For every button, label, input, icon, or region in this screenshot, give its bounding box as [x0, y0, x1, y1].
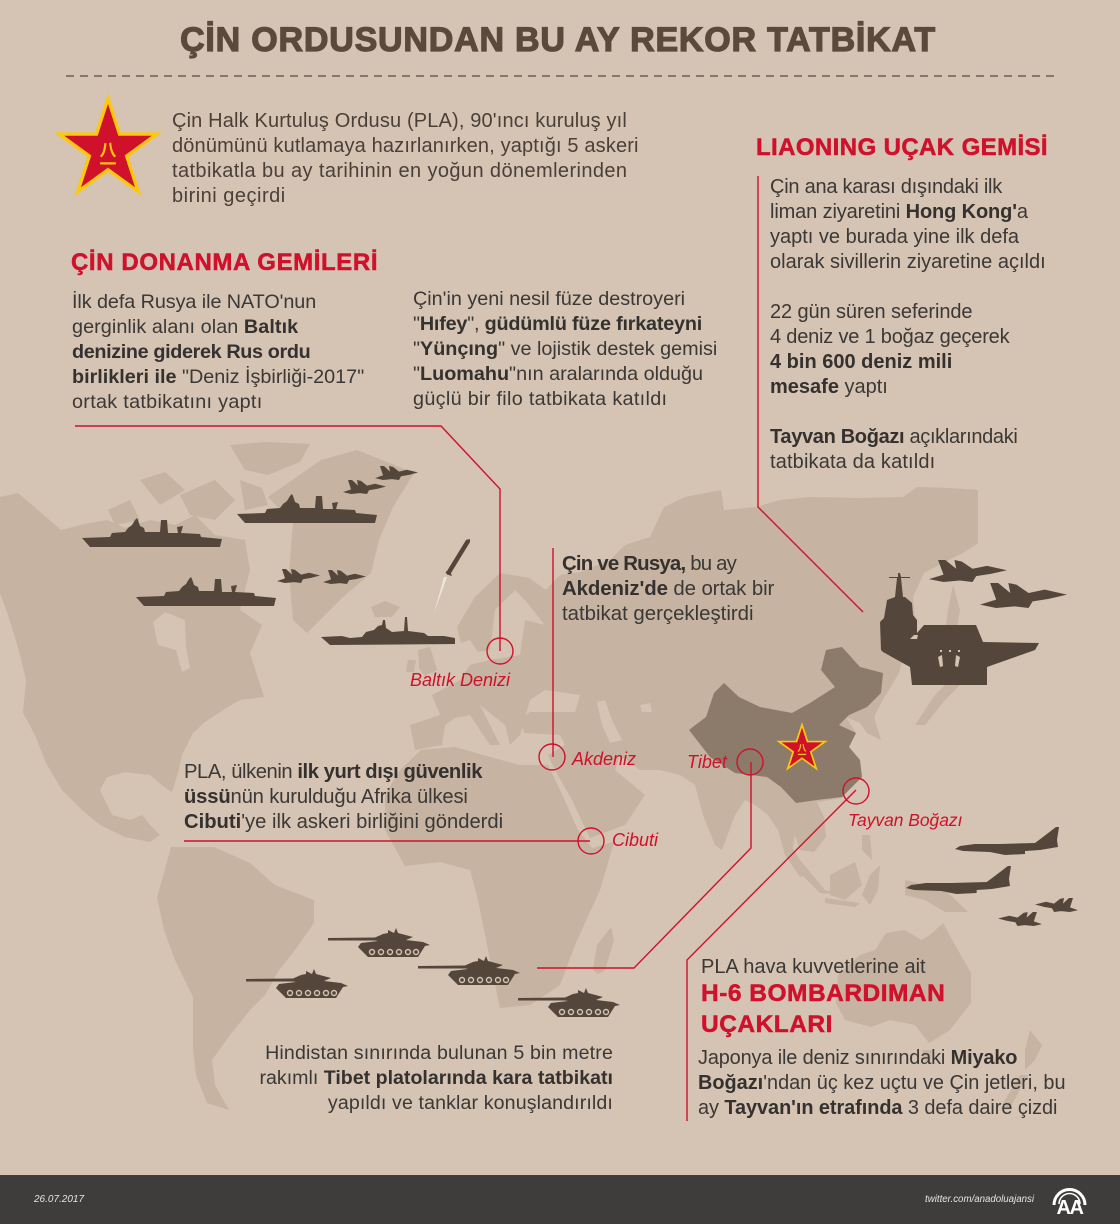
text: Djibouti: üssünün kurulduğu Afrika ülkesi — [184, 786, 468, 808]
text: Tibet: rakımlı Tibet platolarında kara tatbikatı — [259, 1067, 613, 1089]
text: Djibouti — [184, 761, 503, 833]
heading: H-6 bombers: H-6 BOMBARDIMAN — [701, 980, 945, 1007]
date: 26.07.2017 — [34, 1194, 84, 1205]
text: fleet: "Hıfey", güdümlü füze fırkateyni — [413, 313, 702, 335]
text: fleet: Çin'in yeni nesil füze destroyeri — [413, 288, 685, 310]
text: Liaoning: Tayvan Boğazı açıklarındaki — [770, 426, 1017, 448]
text: Djibouti: PLA, ülkenin ilk yurt dışı güvenlik — [184, 761, 482, 783]
text: fleet: güçlü bir filo tatbikata katıldı — [413, 388, 667, 410]
connector: Liaoning — [758, 176, 863, 612]
text: Baltic exercise — [72, 291, 364, 413]
heading: H-6 bombers: UÇAKLARI — [701, 1011, 833, 1038]
text: Mediterranean — [562, 553, 774, 625]
twitter handle: twitter.com/anadoluajansi — [925, 1194, 1034, 1205]
text: Mediterranean: tatbikat gerçekleştirdi — [562, 603, 754, 625]
text: Tibet — [259, 1042, 613, 1114]
dashed divider — [66, 75, 1055, 77]
connector: Akdeniz — [539, 548, 565, 770]
connector: Tayvan Boğazı — [687, 778, 869, 1121]
bombers — [906, 827, 1059, 894]
text: Baltic exercise: gerginlik alanı olan Baltık — [72, 316, 298, 338]
title: ÇİN ORDUSUNDAN BU AY REKOR TATBİKAT — [180, 21, 936, 59]
heading: Çin donanma gemileri: ÇİN DONANMA GEMİLERİ — [71, 249, 378, 276]
text: Liaoning: olarak sivillerin ziyaretine açıldı — [770, 251, 1046, 273]
small jets — [998, 898, 1078, 926]
text: fleet: "Yünçıng" ve lojistik destek gemisi — [413, 338, 717, 360]
label: Tayvan Boğazı: Tayvan Boğazı — [848, 810, 962, 830]
text: Miyako — [698, 1047, 1066, 1119]
label: Baltık Denizi: Baltık Denizi — [410, 670, 510, 690]
carrier jets — [929, 560, 1067, 608]
text: Liaoning: tatbikata da katıldı — [770, 451, 935, 473]
text: PLA air force: PLA hava kuvvetlerine ait — [701, 956, 926, 978]
text: Baltic exercise: denizine giderek Rus ordu — [72, 341, 310, 363]
text: fleet: "Luomahu"nın aralarında olduğu — [413, 363, 703, 385]
tanks — [246, 928, 620, 1017]
text: Mediterranean: Çin ve Rusya, bu ay — [562, 553, 736, 575]
text: Liaoning: 4 deniz ve 1 boğaz geçerek — [770, 326, 1009, 348]
text: Miyako: Japonya ile deniz sınırındaki Miyako — [698, 1047, 1017, 1069]
icon: PLA star: 八 — [100, 136, 116, 161]
intro text: tatbikatla bu ay tarihinin en yoğun dönemlerinden — [172, 160, 627, 182]
intro text: dönümünü kutlamaya hazırlanırken, yaptığı 5 askeri — [172, 135, 639, 157]
text: Miyako: Boğazı'ndan üç kez uçtu ve Çin jetleri, bu — [698, 1072, 1066, 1094]
text: fleet — [413, 288, 717, 410]
icon: star on China — [776, 722, 828, 771]
text: Liaoning: yaptı ve burada yine ilk defa — [770, 226, 1019, 248]
text: Tibet: yapıldı ve tanklar konuşlandırıldı — [328, 1092, 613, 1114]
text: Liaoning: liman ziyaretini Hong Kong'a — [770, 201, 1028, 223]
text: Baltic exercise: İlk defa Rusya ile NATO'nun — [72, 291, 316, 313]
text: Baltic exercise: birlikleri ile "Deniz İşbirliği-2017" — [72, 366, 364, 388]
icon: star on China: 八 — [797, 741, 807, 754]
text: Mediterranean: Akdeniz'de de ortak bir — [562, 578, 774, 600]
connector: Baltık Denizi — [75, 426, 513, 664]
connector: Cibuti — [184, 828, 604, 854]
china highlighted — [689, 647, 883, 803]
intro text — [172, 110, 639, 207]
footer bar — [0, 1175, 1120, 1224]
text: Miyako: ay Tayvan'ın etrafında 3 defa daire çizdi — [698, 1097, 1057, 1119]
label: Cibuti: Cibuti — [612, 830, 658, 850]
text: Liaoning: 22 gün süren seferinde — [770, 301, 972, 323]
text: Baltic exercise: ortak tatbikatını yaptı — [72, 391, 263, 413]
aircraft carrier — [880, 573, 1039, 685]
heading: Liaoning: LIAONING UÇAK GEMİSİ — [756, 134, 1048, 161]
text: Djibouti: Cibuti'ye ilk askeri birliğini gönderdi — [184, 811, 503, 833]
intro text: Çin Halk Kurtuluş Ordusu (PLA), 90'ıncı kuruluş yıl — [172, 110, 627, 132]
text: Liaoning: Çin ana karası dışındaki ilk — [770, 176, 1002, 198]
fighter jets over Greenland — [277, 466, 418, 584]
label: Akdeniz: Akdeniz — [572, 749, 636, 769]
missile — [434, 539, 470, 613]
text: Tibet: Hindistan sınırında bulunan 5 bin metre — [265, 1042, 613, 1064]
ships group — [82, 494, 455, 645]
connector: Tibet — [537, 749, 763, 968]
logo: AA — [1052, 1188, 1086, 1216]
icon: PLA star: 一 — [100, 150, 116, 175]
text: Liaoning: mesafe yaptı — [770, 376, 888, 398]
heading: H-6 bombers — [701, 980, 945, 1038]
text: Liaoning: 4 bin 600 deniz mili — [770, 351, 952, 373]
text: Liaoning — [770, 176, 1046, 473]
icon: star on China: 一 — [797, 748, 807, 761]
icon: PLA star — [54, 93, 162, 196]
intro text: birini geçirdi — [172, 185, 286, 207]
label: Tibet: Tibet — [687, 752, 727, 772]
